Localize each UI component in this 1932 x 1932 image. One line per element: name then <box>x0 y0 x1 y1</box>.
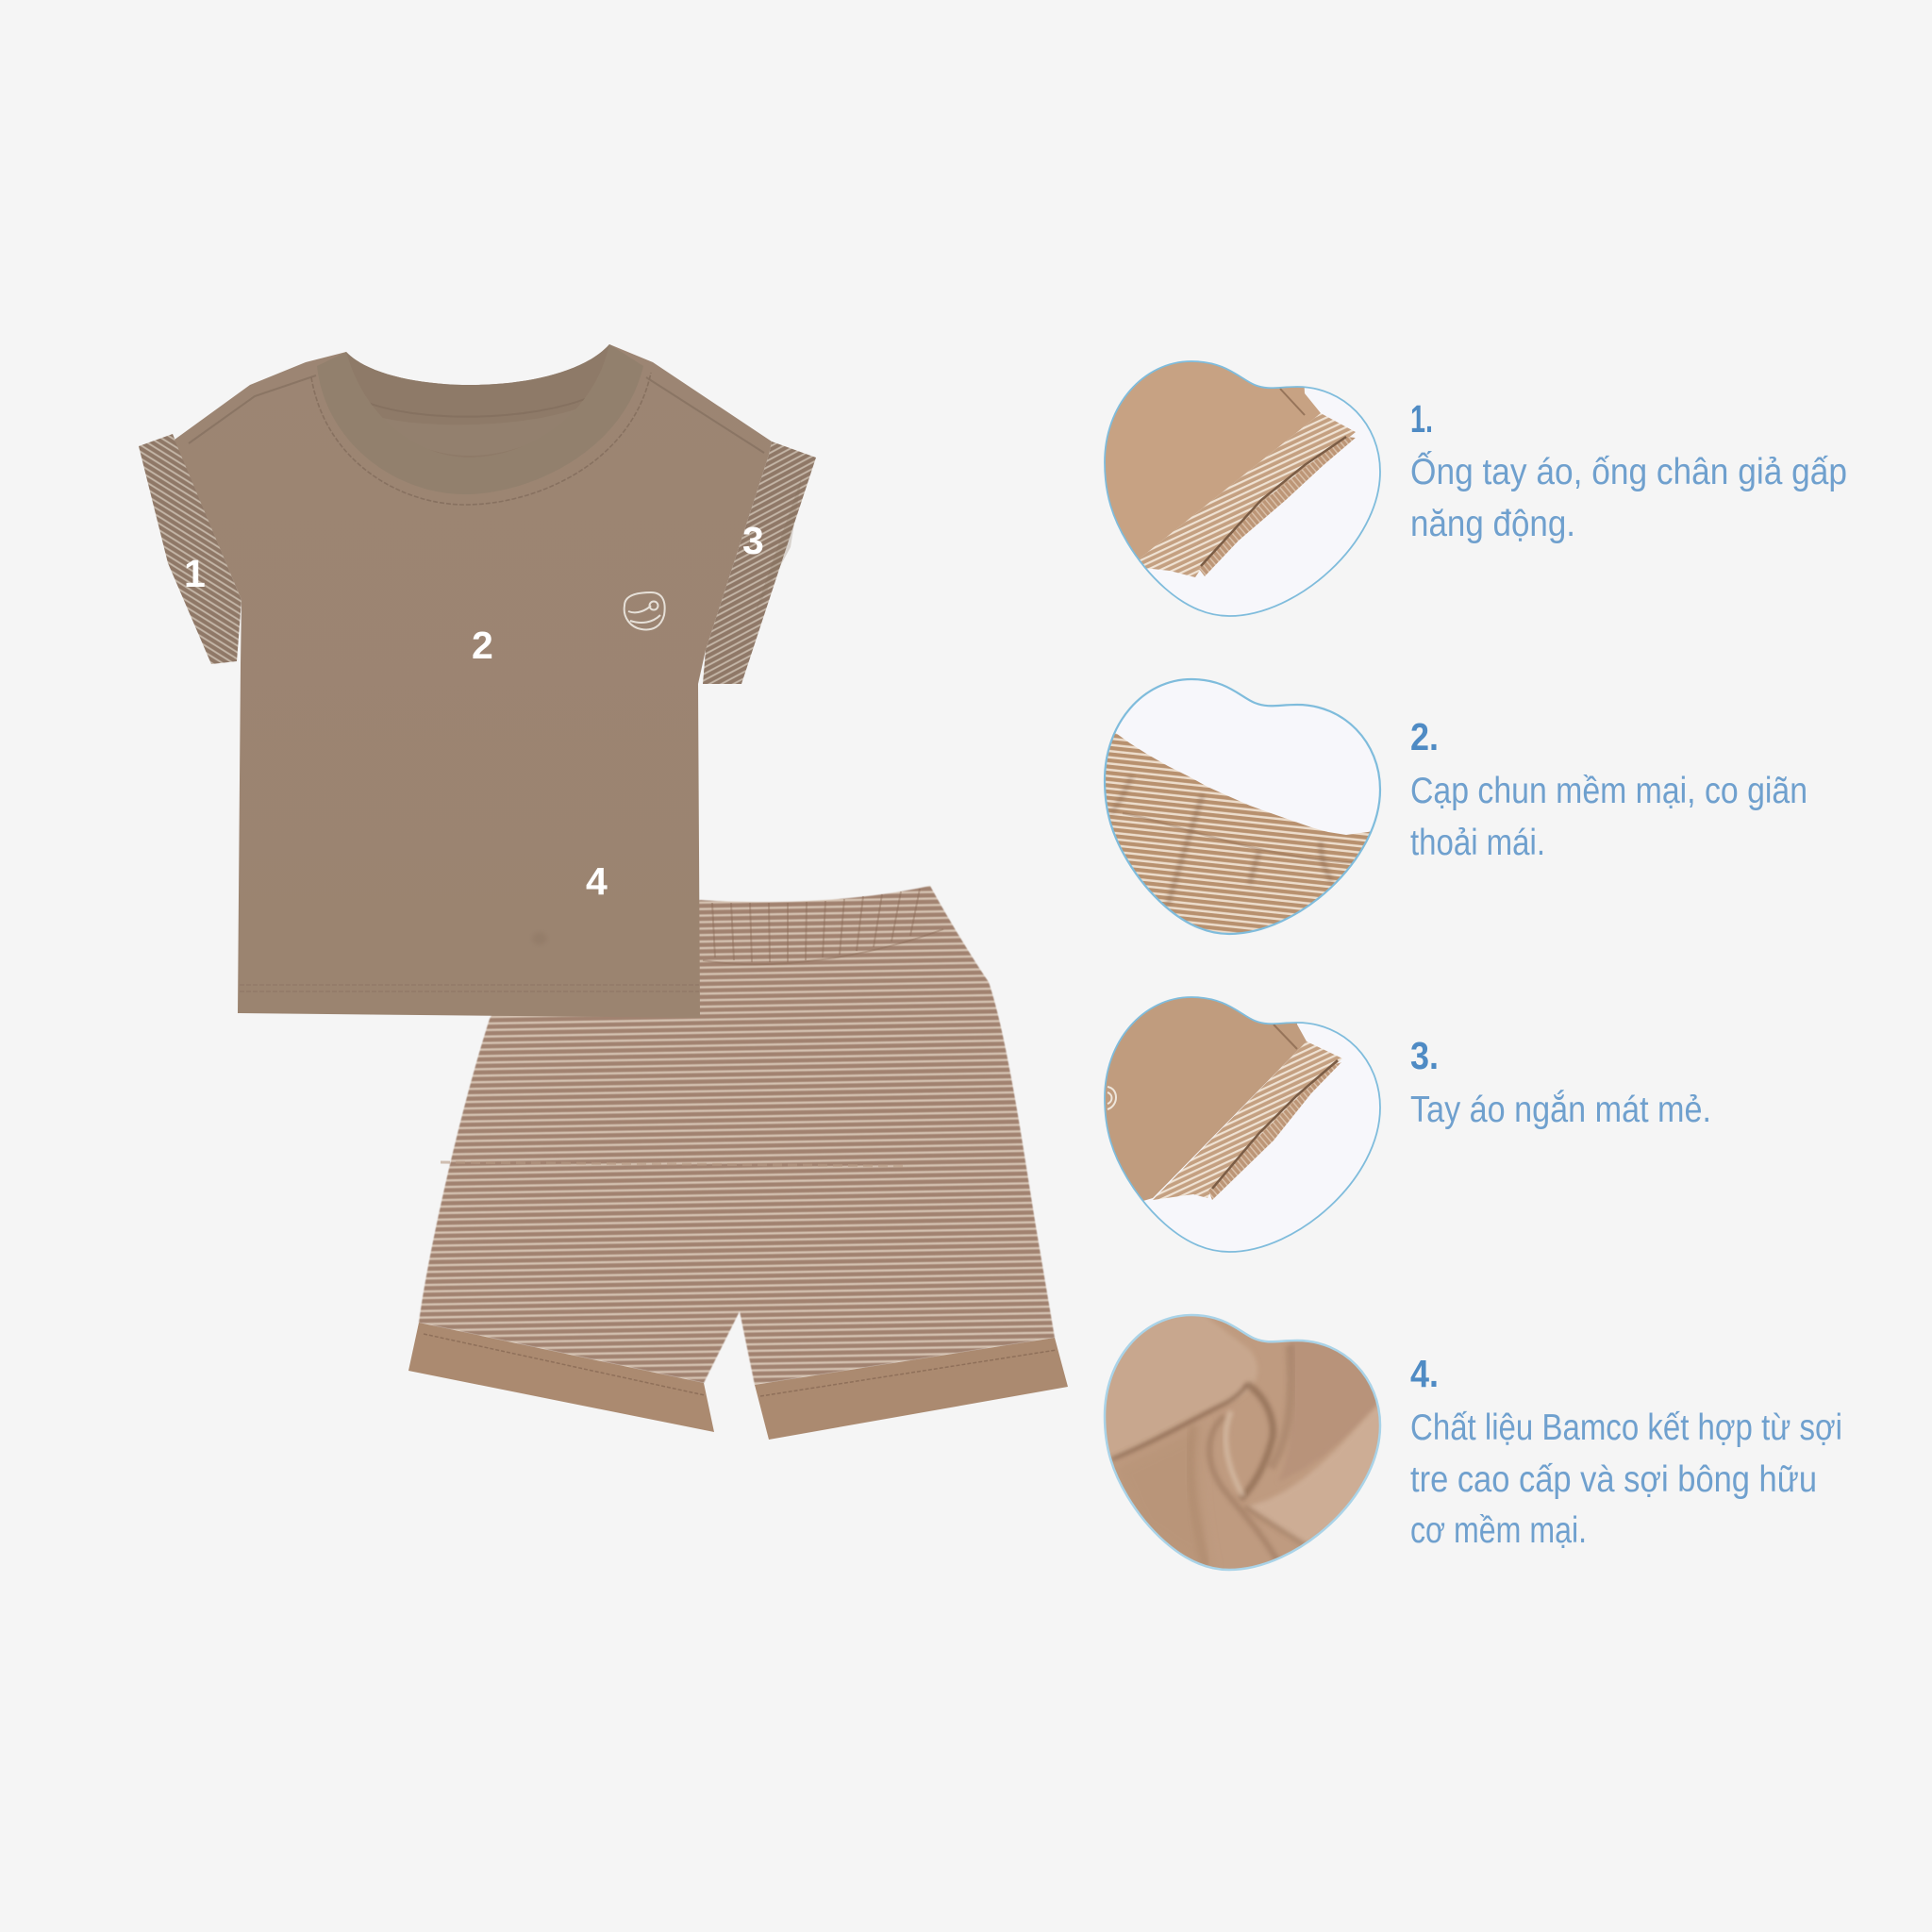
marker 4: 4 <box>586 859 608 903</box>
left sleeve cuff <box>139 434 242 664</box>
text block 4: 4. <box>1410 1352 1439 1395</box>
text block 2: 2. <box>1410 715 1439 758</box>
detail 3: short sleeve heart <box>1104 996 1381 1253</box>
text block 4 <box>1410 1352 1842 1551</box>
hem stitching <box>424 1334 1057 1396</box>
text block 3 <box>1410 1034 1711 1130</box>
detail 1: rolled sleeve heart <box>1104 360 1381 617</box>
text block 1: 1. <box>1410 397 1433 441</box>
text block 4: cơ mềm mại. <box>1410 1510 1587 1551</box>
text block 4: tre cao cấp và sợi bông hữu <box>1410 1459 1817 1500</box>
icon: embroidered logo <box>625 592 665 629</box>
text block 2: Cạp chun mềm mại, co giãn <box>1410 771 1807 811</box>
inner back label area <box>373 406 585 456</box>
right sleeve cuff <box>703 441 816 684</box>
inner back folds <box>363 396 592 440</box>
knee seam <box>441 1162 908 1166</box>
small fabric mark <box>532 932 547 945</box>
collar stitching <box>311 373 651 505</box>
detail 4: bamboo fabric swirl heart <box>1104 1313 1381 1572</box>
text block 1: năng động. <box>1410 504 1575 544</box>
infographic canvas <box>139 344 1845 1572</box>
waistband gathers <box>703 889 943 964</box>
text block 3: Tay áo ngắn mát mẻ. <box>1410 1090 1711 1130</box>
detail 2: elastic waistband heart <box>1104 677 1381 936</box>
striped shorts <box>408 886 1068 1440</box>
text block 2 <box>1410 715 1807 863</box>
t-shirt body <box>175 344 772 1018</box>
text block 2: thoải mái. <box>1410 823 1545 863</box>
bottom hem stitching <box>240 985 699 991</box>
text block 3: 3. <box>1410 1034 1439 1077</box>
collar band <box>317 344 643 494</box>
marker 2: 2 <box>472 624 493 667</box>
panel: product photo <box>139 344 1068 1440</box>
inner neck back <box>346 344 609 458</box>
marker 3: 3 <box>742 519 764 562</box>
left hem cuff <box>408 1323 714 1432</box>
text block 1: Ống tay áo, ống chân giả gấp <box>1410 450 1847 492</box>
shoulder seams <box>189 375 764 453</box>
text block 1 <box>1410 397 1847 544</box>
right sleeve underside <box>755 476 802 613</box>
right hem cuff <box>755 1338 1068 1440</box>
text block 4: Chất liệu Bamco kết hợp từ sợi <box>1410 1407 1842 1448</box>
marker 1: 1 <box>184 552 206 595</box>
